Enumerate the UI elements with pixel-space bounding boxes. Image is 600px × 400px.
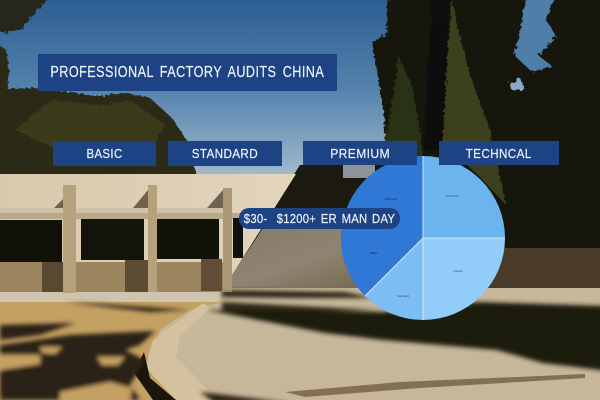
pie chart: Premium [385,197,397,201]
pie chart: Basic [370,251,378,255]
tier label: basic: BASIC [86,146,123,161]
tier label: technical: TECHNCAL [466,146,532,160]
price pill [239,208,400,229]
tier label: basic [53,141,156,166]
right stone wall [480,248,600,312]
building [0,174,296,291]
title: PROFESSIONAL FACTORY AUDITS CHINA [51,64,324,80]
pie chart: Technical [446,194,459,198]
shaded hedge behind ramp [255,165,385,235]
price pill: $30- $1200+ ER MAN DAY [244,211,395,226]
tier label: technical [439,141,559,165]
pie chart: Standard [397,294,409,298]
tier label: standard [168,141,282,166]
kerb [145,303,218,400]
tier label: standard: STANDARD [192,146,258,161]
shadows [0,290,600,400]
tier label: premium: PREMIUM [330,146,390,160]
title [38,54,337,91]
pie chart: Custom [453,269,464,273]
ground [0,288,600,400]
tier label: premium [303,141,417,165]
ramp wall [222,228,400,290]
